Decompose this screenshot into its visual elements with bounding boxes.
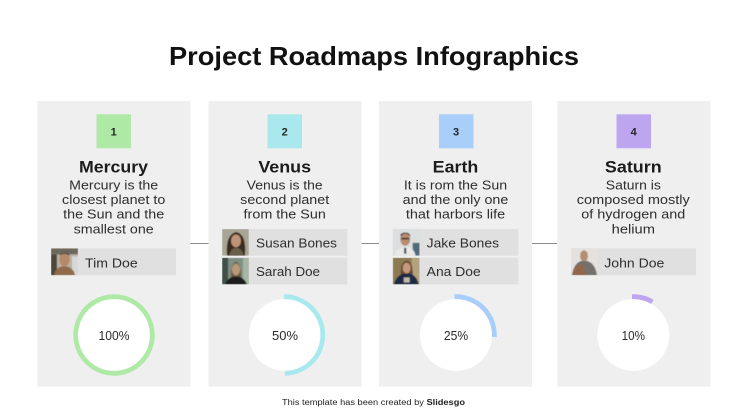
number badge 4: 4 (631, 126, 638, 138)
progress ring: 50%: 50% (272, 329, 298, 343)
progress ring: 50% (249, 297, 323, 373)
number badge 2 (268, 114, 302, 148)
panel: Saturn (557, 101, 710, 387)
heading: Saturn: Saturn (605, 158, 662, 177)
person: John Doe (571, 248, 696, 275)
number badge 4 (616, 114, 651, 148)
person: Sarah Doe: Sarah Doe (256, 264, 320, 279)
person: Jake Bones: Jake Bones (427, 235, 500, 250)
progress ring: 100% (76, 297, 152, 373)
person: Susan Bones: Susan Bones (256, 235, 338, 250)
footer credit: This template has been created by Slidesgo (282, 398, 465, 407)
panel: Earth (379, 101, 532, 387)
description: Earth (403, 178, 508, 222)
person: John Doe: John Doe (604, 255, 664, 270)
description: Mercury: Mercury is the (69, 178, 158, 192)
title: Project Roadmaps Infographics (169, 41, 579, 71)
description: Saturn: helium (612, 222, 655, 236)
person: Tim Doe (51, 248, 176, 275)
description: Saturn: Saturn is (606, 178, 661, 192)
panel: Mercury (37, 101, 190, 387)
progress ring: 25%: 25% (444, 329, 468, 343)
heading: Earth: Earth (433, 158, 478, 177)
number badge 1 (96, 114, 131, 148)
description: Venus (240, 178, 330, 222)
progress ring: 25% (420, 297, 494, 371)
description: Venus: second planet (240, 193, 330, 207)
number badge 2: 2 (282, 126, 288, 138)
person: Ana Doe: Ana Doe (427, 264, 481, 279)
description: Mercury: the Sun and the (63, 208, 164, 222)
number badge 1: 1 (111, 126, 117, 138)
connector: Venus to Earth (362, 243, 379, 244)
number badge 3: 3 (453, 126, 459, 138)
description: Earth: It is rom the Sun (404, 178, 507, 192)
panel: Venus (208, 101, 362, 387)
person: Jake Bones (393, 229, 518, 256)
heading: Mercury: Mercury (79, 158, 149, 177)
person: Ana Doe (393, 258, 518, 284)
connector: Earth to Saturn (532, 243, 557, 244)
person: Susan Bones (222, 229, 347, 256)
progress ring: 10%: 10% (622, 329, 645, 343)
description: Saturn (577, 178, 691, 236)
description: Earth: that harbors life (406, 208, 505, 222)
description: Mercury: smallest one (74, 222, 154, 236)
description: Saturn: of hydrogen and (581, 208, 685, 222)
progress ring: 10% (597, 297, 669, 371)
person: Sarah Doe (222, 258, 347, 284)
description: Saturn: composed mostly (577, 193, 691, 207)
heading: Venus: Venus (258, 158, 311, 177)
number badge 3 (439, 114, 474, 148)
person: Tim Doe: Tim Doe (85, 255, 138, 270)
description: Venus: from the Sun (244, 208, 326, 222)
connector: Mercury to Venus (190, 243, 208, 244)
description: Earth: and the only one (403, 193, 508, 207)
description: Mercury (62, 178, 165, 236)
description: Mercury: closest planet to (62, 193, 165, 207)
progress ring: 100%: 100% (98, 329, 130, 343)
description: Venus: Venus is the (247, 178, 323, 192)
